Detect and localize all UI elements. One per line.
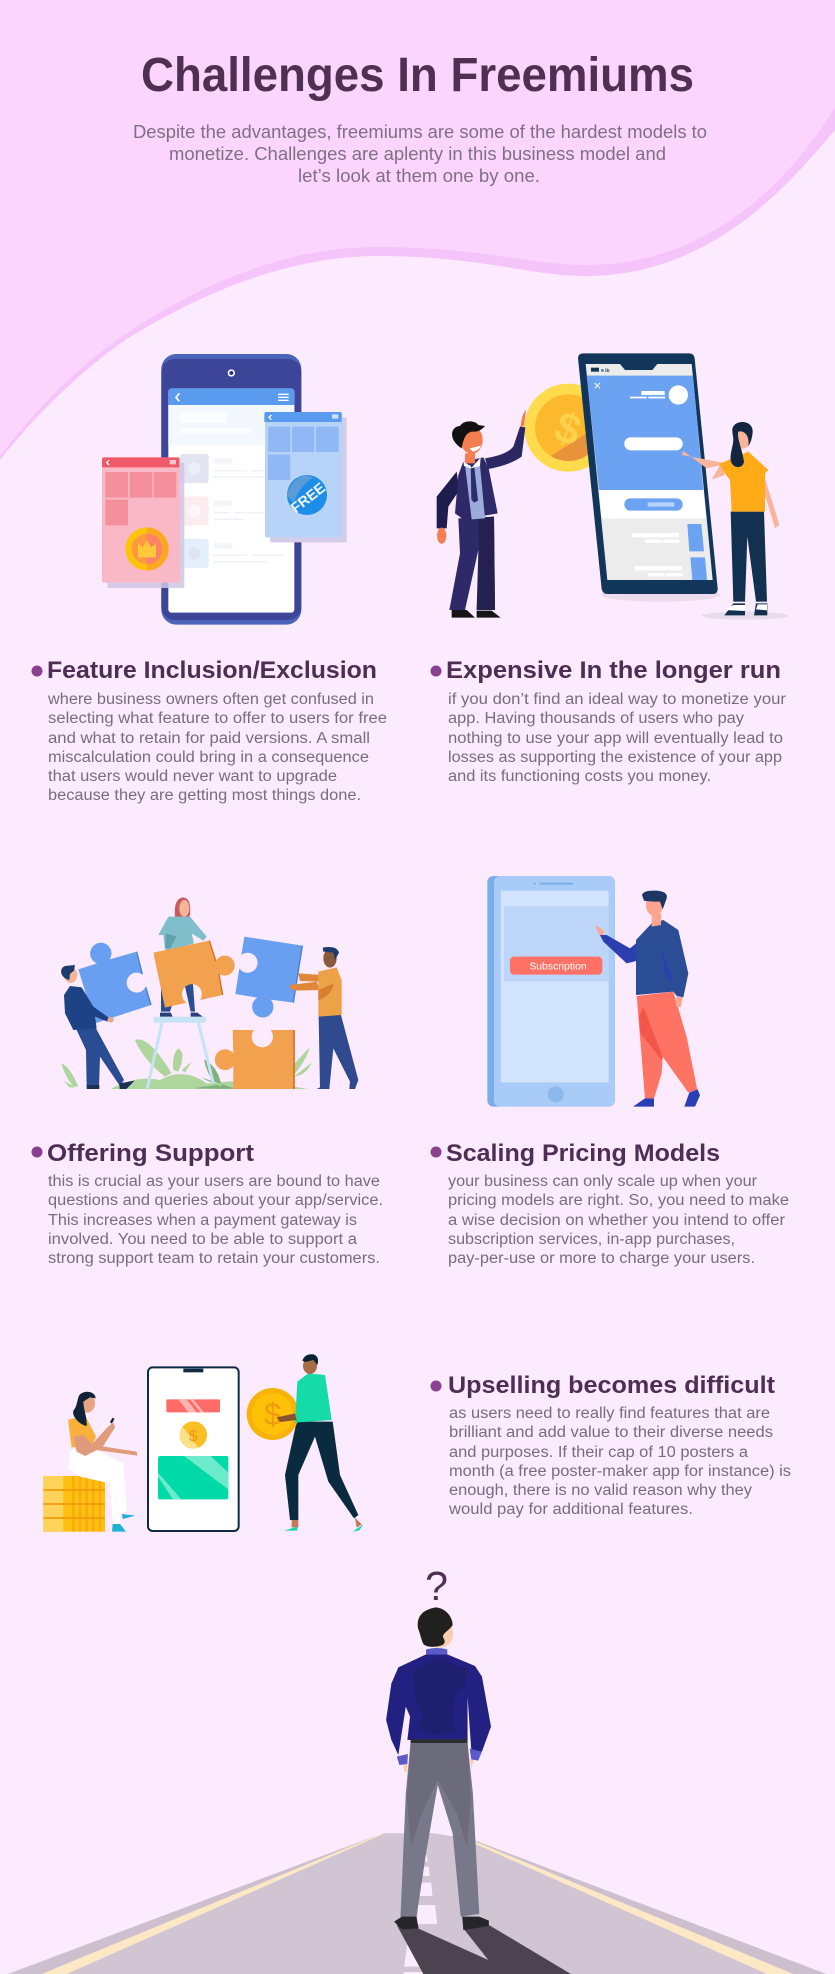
heading: offering support: Offering Support [47, 1140, 254, 1167]
text: feature inclusion/exclusion: and what to retain for paid versions. A small [48, 730, 370, 747]
heading: scaling pricing models: Scaling Pricing Models [446, 1140, 720, 1167]
text: upselling becomes difficult: brilliant and add value to their diverse needs [449, 1424, 773, 1441]
figure: man on the left [61, 965, 135, 1089]
text: scaling pricing models: a wise decision on whether you intend to offer [448, 1212, 785, 1229]
subscription button: Subscription [529, 961, 587, 972]
question mark: ? [425, 1563, 448, 1609]
illustration: man and woman with giant coin and phone [437, 353, 788, 620]
text: offering support [48, 1173, 383, 1267]
text: scaling pricing models: pay-per-use or more to charge your users. [448, 1250, 755, 1267]
illustration: phone with free and premium cards: FREE [288, 480, 329, 517]
illustration: man and woman with giant coin and phone: 9 lb [601, 368, 610, 374]
text: expensive in the longer run: nothing to use your app will eventually lead to [448, 730, 783, 747]
text: expensive in the longer run: losses as supporting the existence of your app [448, 749, 782, 766]
illustration: man and woman with giant coin and phone: $ [548, 403, 587, 456]
text: expensive in the longer run: app. Having thousands of users who pay [448, 710, 744, 727]
figure: man on the right [289, 947, 358, 1089]
illustration: team assembling puzzle pieces [61, 897, 358, 1089]
illustration: man at a phone with subscription button [487, 876, 700, 1107]
text: upselling becomes difficult: as users need to really find features that are [449, 1405, 770, 1422]
title: Challenges In Freemiums [141, 49, 694, 102]
text: feature inclusion/exclusion: because they are getting most things done. [48, 787, 361, 804]
intro paragraph: Despite the advantages, freemiums are some of the hardest models to [133, 122, 707, 142]
header wave background [0, 0, 835, 460]
text: offering support: this is crucial as your users are bound to have [48, 1173, 380, 1190]
illustration: woman on coins, phone and man with coin: $ [189, 1428, 198, 1445]
text: expensive in the longer run [448, 691, 786, 785]
heading: expensive in the longer run: Expensive In the longer run [446, 657, 781, 684]
illustration: man looking down the road [386, 1607, 491, 1930]
text: scaling pricing models: subscription services, in-app purchases, [448, 1231, 735, 1248]
illustration: road ahead [8, 1833, 826, 1974]
text: upselling becomes difficult: would pay for additional features. [448, 1501, 693, 1518]
coin stack [43, 1476, 105, 1532]
text: expensive in the longer run: if you don’t find an ideal way to monetize your [448, 691, 786, 708]
text: offering support: involved. You need to be able to support a [48, 1231, 357, 1248]
intro paragraph: monetize. Challenges are aplenty in this business model and [169, 144, 666, 164]
intro paragraph: let’s look at them one by one. [298, 166, 540, 186]
text: upselling becomes difficult: and purposes. If their cap of 10 posters a [449, 1444, 748, 1461]
illustration: woman on coins, phone and man with coin [43, 1354, 363, 1532]
text: scaling pricing models: pricing models are right. So, you need to make [448, 1192, 789, 1209]
text: feature inclusion/exclusion: that users would never want to upgrade [48, 768, 337, 785]
heading: feature inclusion/exclusion: Feature Inclusion/Exclusion [47, 657, 377, 684]
figure: seated woman [68, 1392, 137, 1532]
text: scaling pricing models [448, 1173, 789, 1267]
text: scaling pricing models: your business can only scale up when your [448, 1173, 757, 1190]
subscription button [510, 957, 602, 975]
text: upselling becomes difficult [448, 1405, 791, 1518]
figure: man holding coin [247, 1354, 363, 1532]
text: upselling becomes difficult: month (a free poster-maker app for instance) is [449, 1463, 791, 1480]
text: feature inclusion/exclusion: miscalculation could bring in a consequence [48, 749, 369, 766]
text: offering support: strong support team to retain your customers. [48, 1250, 380, 1267]
figure: man holding coin: $ [264, 1397, 281, 1432]
heading: upselling becomes difficult: Upselling becomes difficult [448, 1372, 775, 1399]
intro paragraph [133, 122, 707, 186]
text: feature inclusion/exclusion [47, 691, 387, 804]
text: offering support: questions and queries about your app/service. [48, 1192, 383, 1209]
illustration: phone with free and premium cards [102, 354, 347, 625]
text: feature inclusion/exclusion: where business owners often get confused in [47, 691, 374, 708]
text: feature inclusion/exclusion: selecting what feature to offer to users for free [48, 710, 387, 727]
text: upselling becomes difficult: enough, there is no valid reason why they [449, 1482, 752, 1499]
text: expensive in the longer run: and its functioning costs you money. [448, 768, 711, 785]
text: offering support: This increases when a payment gateway is [48, 1212, 357, 1229]
